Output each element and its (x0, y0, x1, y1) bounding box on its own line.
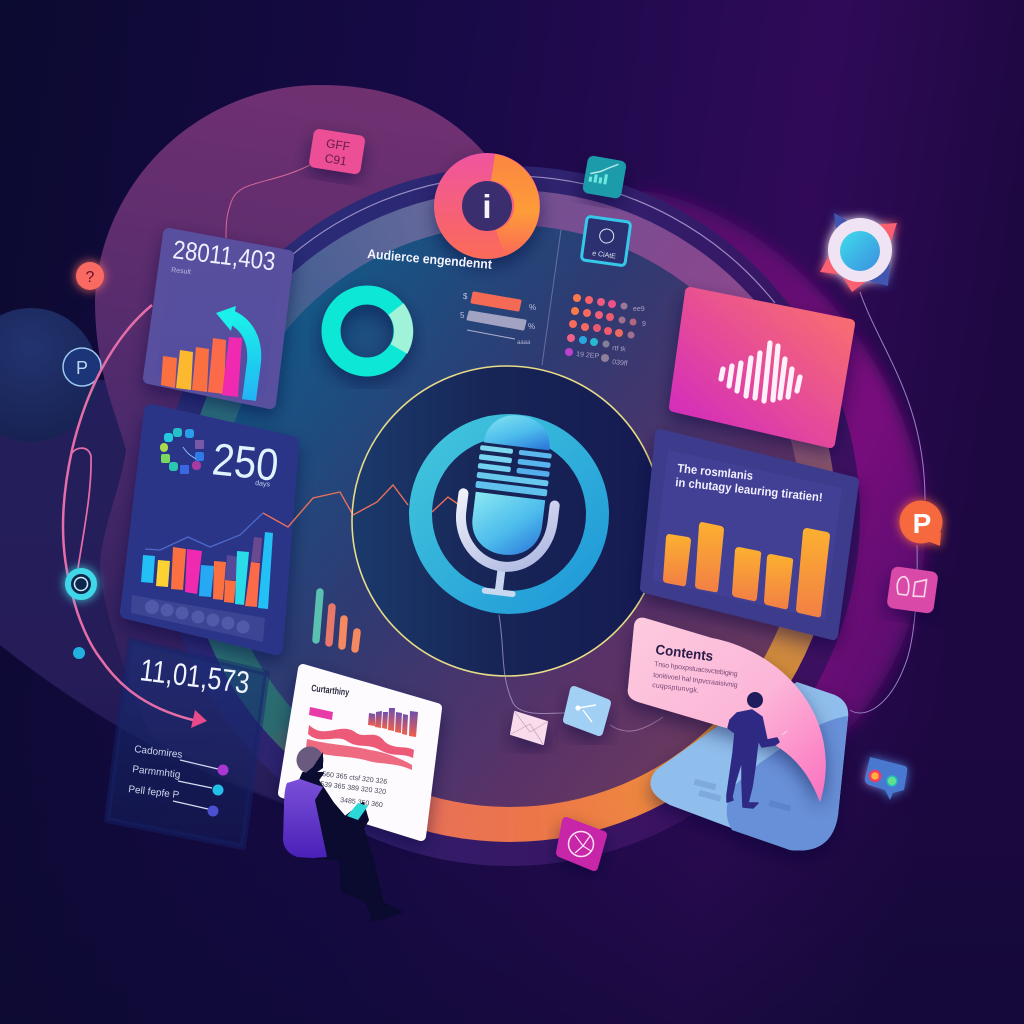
donut: cyan (331, 295, 404, 367)
icon: chat (865, 757, 907, 800)
mic dome (484, 412, 553, 450)
mini comparison bars (460, 292, 536, 346)
legend rows: Cadomires (134, 744, 183, 761)
mini comparison bars: % (528, 322, 535, 331)
heading: audience engagement: Audierce engendennt (367, 246, 493, 272)
arrow head (191, 710, 207, 728)
icon: blue dot (73, 647, 85, 659)
donut: top (434, 153, 540, 259)
mic lower body (469, 492, 545, 559)
icon: book (886, 566, 939, 614)
tag icon (308, 128, 366, 175)
mic stand (499, 565, 502, 591)
dial of dots (160, 428, 204, 474)
card: metrics chart (127, 411, 292, 648)
report wave 2 (306, 739, 412, 770)
left circle (0, 308, 98, 442)
phone (347, 803, 368, 820)
info glyph: i (482, 188, 492, 225)
person sitting (283, 746, 402, 921)
inner trend (432, 497, 462, 512)
number: 11,01,573 (138, 652, 252, 700)
icon: magenta globe (560, 821, 603, 867)
bar chart (141, 532, 273, 609)
connector lines (226, 165, 925, 731)
outer disk (160, 166, 860, 866)
orange bars (663, 522, 830, 617)
report bars (368, 708, 418, 737)
waveform bars (721, 343, 800, 401)
card: bar summary (645, 434, 854, 635)
trend line inside circle (353, 485, 408, 515)
dot matrix (565, 294, 646, 368)
central circle (352, 366, 662, 676)
mini comparison bars: 5 (460, 311, 465, 320)
contents body (652, 661, 738, 695)
pink flow arrow (63, 305, 207, 728)
dot matrix: 039ff (612, 359, 628, 368)
icon: question badge (76, 262, 104, 290)
contents body: tonitivoel hal tnpvcraaisivnig (653, 672, 738, 689)
lower connector line (499, 615, 565, 714)
progress ring band (184, 190, 836, 842)
icon: framed (581, 216, 631, 266)
contents heading: Contents (655, 641, 714, 664)
icon: framed: e CiAtE (592, 250, 617, 261)
plum background blob (95, 85, 515, 810)
heading line 1: The rosmlanis (677, 461, 754, 483)
platform shade (727, 716, 848, 851)
card: waveform (674, 292, 850, 443)
dot matrix: rtf tk (612, 345, 627, 353)
icon: P bubble (900, 500, 942, 546)
icon: share (567, 690, 607, 732)
tag icon: GFF (325, 136, 351, 154)
dot matrix: 9 (642, 321, 646, 328)
icon: star orb (820, 213, 897, 292)
stat number: 28011,403 (171, 234, 277, 277)
legend rows (128, 744, 228, 816)
report waves (308, 725, 414, 758)
vertical divider (542, 230, 561, 365)
legend rows: Parmmhtig (132, 764, 181, 781)
dot matrix: ee9 (633, 306, 645, 313)
mini comparison bars: $ (463, 292, 468, 301)
legend rows: Pell fepfe P (128, 784, 180, 801)
stat caption: Result (171, 267, 191, 276)
curved arrow (216, 306, 254, 400)
platform: blue (650, 682, 848, 851)
rising bars (161, 337, 242, 397)
inner disk (219, 225, 801, 807)
microphone (452, 410, 565, 601)
icon: teal chart (582, 155, 627, 199)
microphone ring (420, 426, 598, 602)
mini comparison bars: % (529, 303, 536, 312)
small vertical bars (316, 592, 357, 649)
icon: question badge: ? (86, 269, 95, 286)
top arc line (270, 176, 775, 303)
card: contents (628, 618, 826, 802)
inner panel (652, 450, 842, 620)
days caption: days (255, 480, 271, 489)
icon: blue line circle (63, 348, 101, 386)
icon: mail (511, 712, 547, 744)
mini comparison bars: aaaa (517, 340, 531, 346)
magenta swoosh (640, 190, 925, 750)
dark silhouette (300, 773, 402, 921)
report table: 3485 350 360 (340, 797, 383, 809)
contents body: Tnso hpoxpstuacsvctebiging (654, 661, 738, 678)
head (296, 746, 324, 774)
report table: 560 365 ctsf 320 326 (322, 771, 388, 786)
left indigo shape (0, 380, 300, 810)
icon: blue line circle: P (76, 358, 88, 378)
report title: Curtarthiny (311, 683, 350, 699)
heading line 2: in chutagy leauring tiratien! (675, 475, 823, 504)
report table (320, 771, 388, 809)
trend line (145, 513, 263, 550)
icon: teal node (68, 571, 94, 597)
face (303, 752, 323, 775)
card: white report (283, 669, 437, 836)
card: top stat (149, 234, 288, 403)
contents body: cuqpsptunvgk. (652, 682, 699, 695)
icon: P bubble: P (913, 508, 931, 539)
footer strip (131, 595, 265, 642)
card: dark legend (107, 640, 267, 847)
person standing (727, 692, 787, 808)
grille bars (475, 445, 552, 496)
body (283, 779, 327, 858)
dot matrix: 19 2EP (576, 351, 600, 360)
tag icon: C91 (324, 151, 348, 169)
floor marks (694, 779, 791, 811)
trend line salmon section (263, 485, 408, 527)
report table: 539 365 389 320 320 (320, 781, 386, 796)
mic yoke (455, 493, 555, 572)
number 250: 250 (210, 433, 281, 491)
report tag (309, 707, 333, 720)
